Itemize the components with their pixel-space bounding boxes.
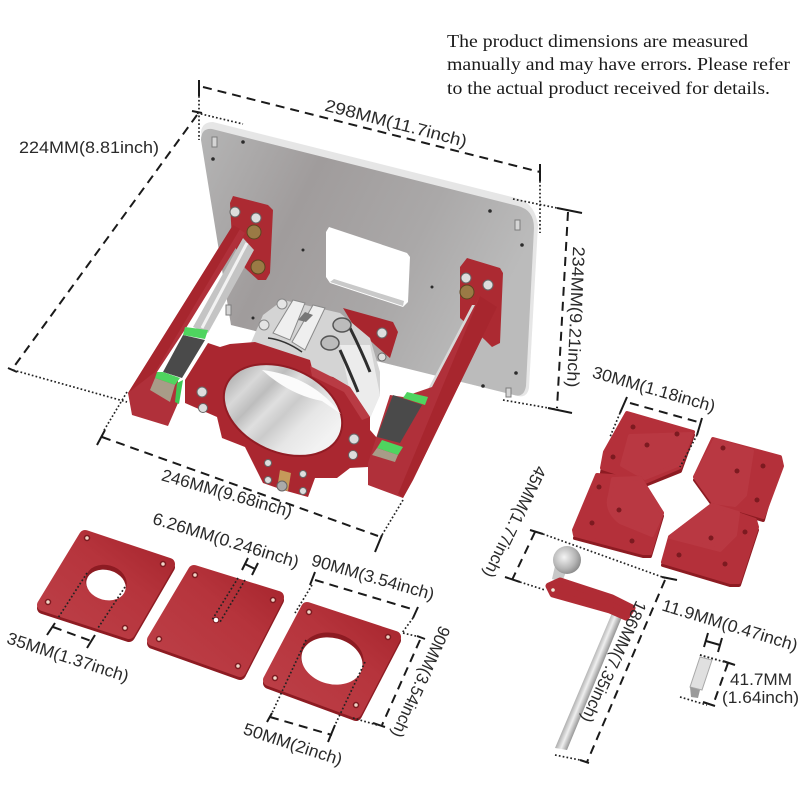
guide pad: bottom left	[574, 475, 662, 556]
guide pad set	[574, 413, 782, 585]
dimension: 224MM rail depth: 224MM(8.81inch)	[19, 138, 159, 157]
right mounting bracket	[460, 258, 503, 347]
dimension: 298MM plate width: 298MM(11.7inch)	[323, 96, 469, 151]
guide pad: top right	[695, 439, 782, 520]
dimension: 50MM hole	[241, 640, 365, 769]
crank handle	[549, 546, 632, 750]
dimension: 90MM plate depth	[353, 623, 454, 740]
mounting plate	[201, 122, 538, 397]
dimension: 41.7MM pin length: (1.64inch)	[722, 688, 799, 707]
insert plate: 35 mm hole	[43, 536, 169, 636]
dimension: 6.26MM hole	[150, 509, 301, 622]
dimension: 90MM plate width: 90MM(3.54inch)	[309, 551, 437, 604]
dimension: 234MM plate height: 234MM(9.21inch)	[563, 246, 588, 388]
dimension: 11.9MM pin diameter: 11.9MM(0.47inch)	[660, 596, 800, 655]
dimension: 234MM plate height	[503, 199, 588, 413]
dimension: 186MM shaft length: 186MM(7.35inch)	[577, 598, 650, 726]
dimension: 41.7MM pin length	[680, 655, 799, 707]
insert plate: 6.26 mm hole	[153, 571, 278, 674]
left linear rail	[128, 225, 254, 426]
dimension: 30MM pad width	[590, 363, 718, 467]
dimension: 246MM ring width	[97, 392, 403, 552]
insert plate: 50 mm hole	[269, 608, 395, 715]
left mounting bracket	[230, 196, 273, 280]
dimension: 6.26MM hole: 6.26MM(0.246inch)	[150, 509, 301, 572]
dimension: 224MM rail depth	[8, 111, 243, 402]
dimension: 246MM ring width: 246MM(9.68inch)	[159, 466, 294, 521]
right linear rail	[368, 296, 497, 498]
dimension: 41.7MM pin length: 41.7MM	[730, 670, 792, 689]
note: product dimension disclaimer: to the actual product received for details.	[447, 78, 770, 98]
dimension: 50MM hole: 50MM(2inch)	[241, 719, 345, 769]
dimension: 35MM hole: 35MM(1.37inch)	[5, 629, 131, 686]
dimension: 186MM shaft length	[555, 577, 677, 763]
dimension: 45MM handle height: 45MM(1.77inch)	[479, 463, 550, 581]
dimension: 30MM pad width: 30MM(1.18inch)	[590, 363, 718, 416]
note: product dimension disclaimer	[447, 31, 790, 98]
note: product dimension disclaimer: manually and may have errors. Please refer	[447, 54, 790, 74]
dimension: 45MM handle height	[479, 463, 665, 590]
dimension: 35MM hole	[5, 573, 131, 686]
mount block behind clamp	[343, 308, 398, 361]
dimension: 90MM plate depth: 90MM(3.54inch)	[388, 623, 454, 740]
clamp mechanism	[250, 299, 380, 418]
main assembly	[128, 122, 538, 498]
router clamp ring	[185, 342, 377, 497]
dimension: 90MM plate width	[295, 551, 437, 633]
dimension: 298MM plate width	[199, 80, 540, 233]
guide pad: bottom right	[663, 505, 757, 585]
locating pin	[690, 657, 712, 698]
note: product dimension disclaimer: The product dimensions are measured	[447, 31, 748, 51]
guide pad: top left	[602, 413, 693, 485]
